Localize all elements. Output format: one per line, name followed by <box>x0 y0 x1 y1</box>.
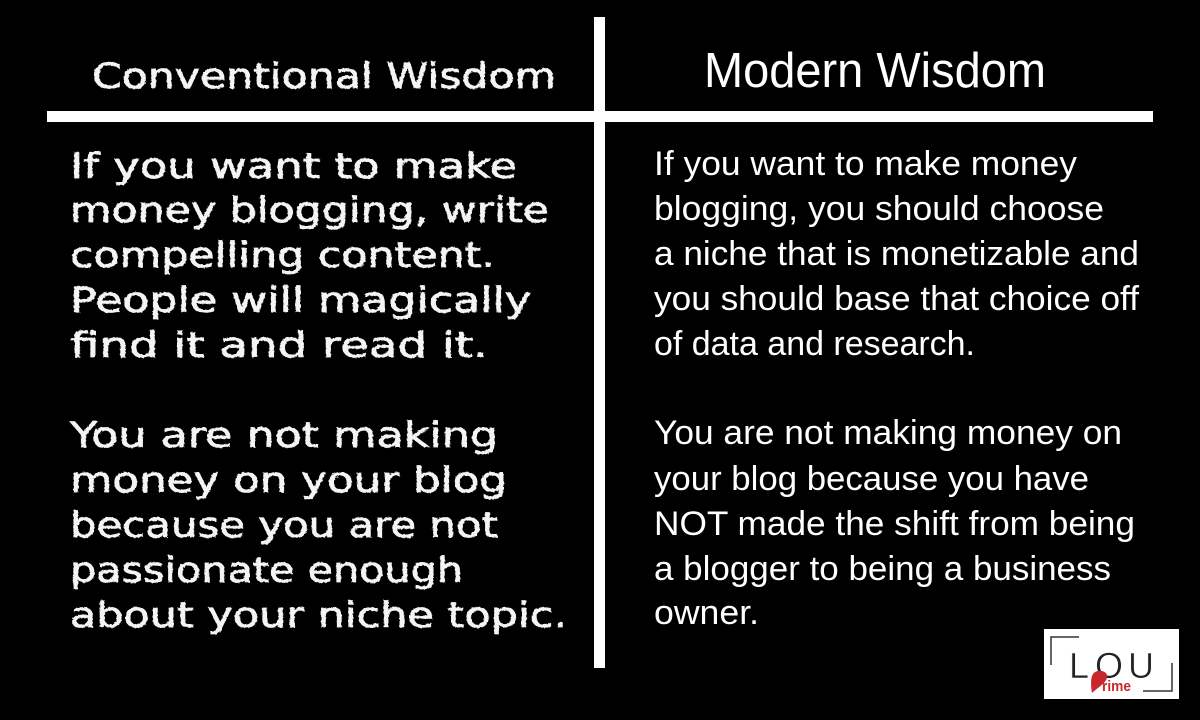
heading: Modern Wisdom: Modern Wisdom <box>704 44 1046 98</box>
text block: conventional wisdom paragraph two <box>69 416 567 636</box>
text block: conventional wisdom paragraph one <box>70 147 549 366</box>
text block: modern wisdom paragraph two: NOT made the shift from being <box>654 505 1135 543</box>
text block: conventional wisdom paragraph two: about your niche topic. <box>70 596 567 636</box>
heading: Conventional Wisdom: Conventional Wisdom <box>92 57 556 97</box>
text block: conventional wisdom paragraph two: You are not making <box>69 416 498 456</box>
text block: conventional wisdom paragraph two: because you are not <box>70 506 498 546</box>
text block: conventional wisdom paragraph one: find it and read it. <box>70 326 488 366</box>
logo: Lou Prime: rime <box>1102 678 1131 695</box>
text block: modern wisdom paragraph two: owner. <box>654 594 759 632</box>
text block: conventional wisdom paragraph two: money on your blog <box>70 461 507 501</box>
logo: Lou Prime: O <box>1095 645 1123 686</box>
text block: modern wisdom paragraph one: a niche that is monetizable and <box>654 235 1139 273</box>
text block: conventional wisdom paragraph one: People will magically <box>70 281 531 321</box>
logo: Lou Prime: L <box>1069 645 1089 686</box>
text block: modern wisdom paragraph one: you should base that choice off <box>654 280 1139 318</box>
text block: modern wisdom paragraph two <box>654 414 1135 632</box>
logo: Lou Prime <box>1044 629 1179 699</box>
text block: modern wisdom paragraph one <box>654 145 1139 363</box>
text block: modern wisdom paragraph two: your blog because you have <box>654 460 1089 498</box>
text block: modern wisdom paragraph one: blogging, you should choose <box>654 190 1104 228</box>
text block: conventional wisdom paragraph two: passionate enough <box>70 551 463 591</box>
text block: modern wisdom paragraph two: a blogger to being a business <box>654 550 1111 588</box>
text block: modern wisdom paragraph one: If you want to make money <box>654 145 1078 183</box>
text block: conventional wisdom paragraph one: compelling content. <box>70 236 495 276</box>
text block: modern wisdom paragraph one: of data and research. <box>654 325 975 363</box>
text block: modern wisdom paragraph two: You are not making money on <box>654 414 1122 452</box>
text block: conventional wisdom paragraph one: money blogging, write <box>70 191 549 231</box>
vertical divider <box>594 17 605 668</box>
logo: Lou Prime: U <box>1128 645 1154 686</box>
text block: conventional wisdom paragraph one: If you want to make <box>70 147 517 187</box>
horizontal divider <box>47 111 1153 122</box>
